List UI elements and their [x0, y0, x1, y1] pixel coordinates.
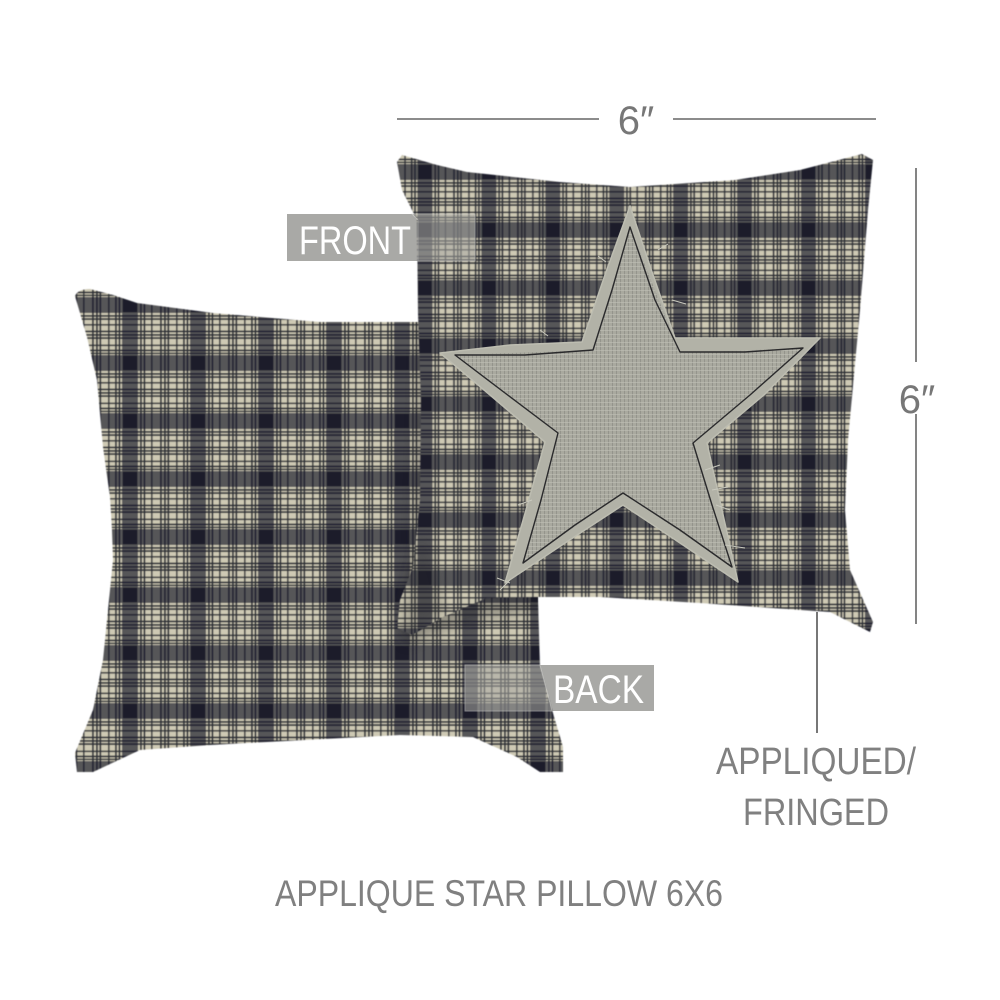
label background: back — [465, 665, 654, 711]
callout: appliqued / fringed: APPLIQUED/ — [716, 741, 916, 783]
label background: front — [287, 214, 475, 261]
pillow: back — [75, 289, 563, 772]
star fringe — [497, 244, 745, 590]
title: APPLIQUE STAR PILLOW 6X6 — [275, 873, 723, 914]
label: back: BACK — [553, 668, 644, 712]
width dimension: 6 inches: 6″ — [618, 99, 654, 143]
label: back — [465, 665, 644, 712]
star centre — [455, 227, 803, 567]
star fabric border — [440, 206, 820, 583]
star stitching — [455, 227, 803, 567]
star applique — [440, 206, 820, 590]
height dimension: 6 inches: 6″ — [899, 378, 935, 422]
pillow: front — [397, 154, 873, 635]
callout: appliqued / fringed: FRINGED — [743, 792, 889, 834]
callout: appliqued / fringed — [716, 612, 916, 834]
label: front: FRONT — [299, 219, 411, 263]
